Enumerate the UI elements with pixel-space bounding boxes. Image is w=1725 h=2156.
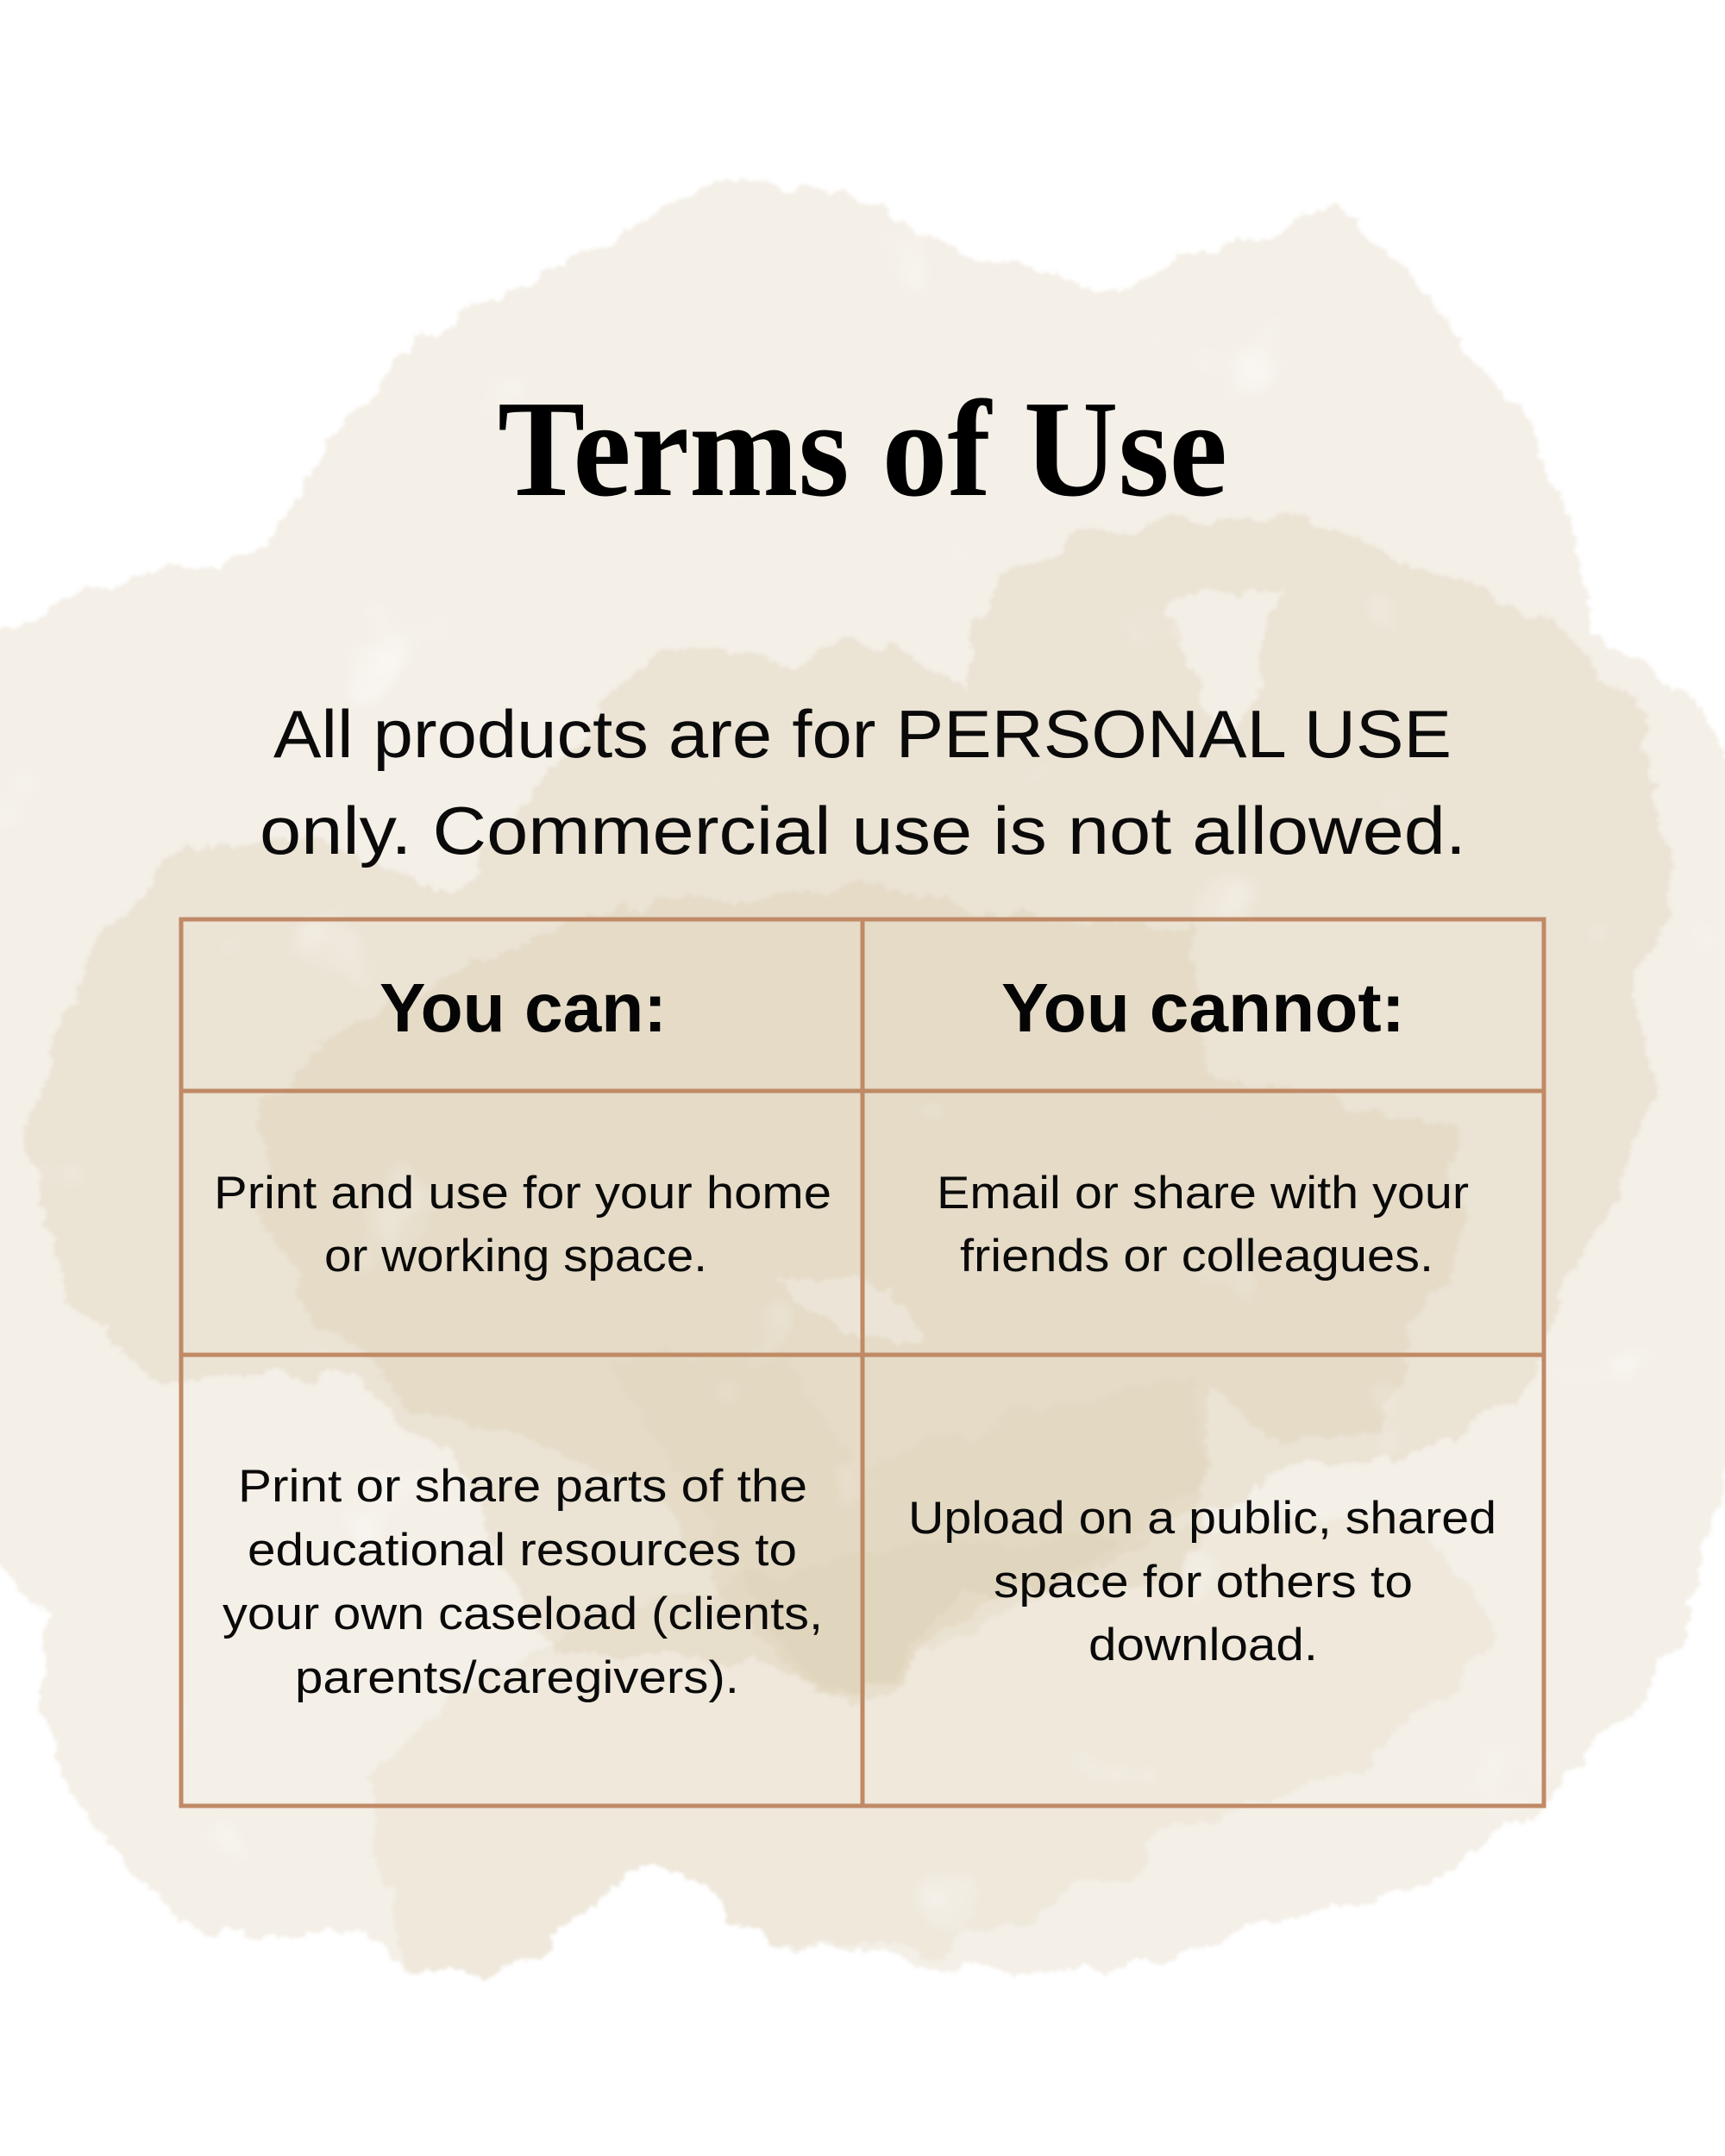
cell: upload on a public space — [908, 1493, 1496, 1670]
cell: print and use: Print and use for your home — [214, 1168, 831, 1219]
intro text — [260, 696, 1466, 868]
cell: print or share parts — [223, 1461, 823, 1703]
cell: print and use: or working space. — [324, 1231, 707, 1282]
header: you cannot: You cannot: — [1001, 969, 1405, 1046]
terms table — [181, 919, 1544, 1806]
cell: print or share parts: Print or share parts of the — [238, 1461, 807, 1512]
cell: upload on a public space: download. — [1088, 1620, 1318, 1670]
cell: print or share parts: your own caseload (clients, — [223, 1589, 823, 1639]
light patches in wash — [776, 586, 1276, 1345]
cell: print and use — [214, 1168, 831, 1282]
header: you can: You can: — [380, 969, 667, 1046]
cell: email or share: friends or colleagues. — [960, 1231, 1433, 1282]
cell: upload on a public space: Upload on a public, shared — [908, 1493, 1496, 1544]
intro text: All products are for PERSONAL USE — [273, 696, 1452, 772]
cell: print or share parts: educational resources to — [248, 1525, 797, 1576]
cell: email or share — [937, 1168, 1469, 1282]
cell: print or share parts: parents/caregivers). — [295, 1652, 739, 1703]
intro text: only. Commercial use is not allowed. — [260, 793, 1466, 868]
title: Terms of Use — [498, 372, 1227, 525]
cell: upload on a public space: space for others to — [994, 1557, 1413, 1608]
cell: email or share: Email or share with your — [937, 1168, 1469, 1219]
